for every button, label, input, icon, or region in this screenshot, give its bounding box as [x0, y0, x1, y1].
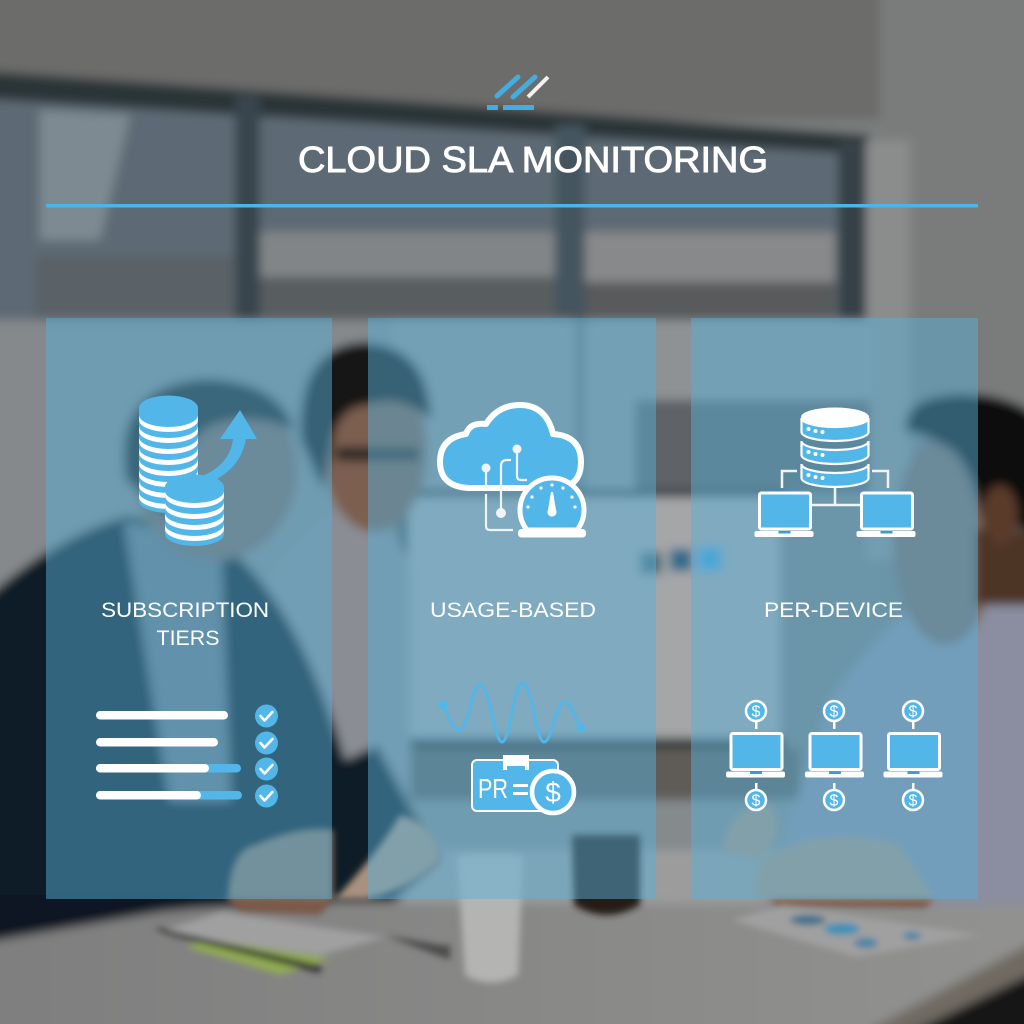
- table: [0, 902, 1024, 1024]
- icon: cloud with gauge: [440, 405, 586, 538]
- title: CLOUD SLA MONITORING: [298, 139, 768, 180]
- icon: feature list with checks: [96, 704, 278, 808]
- icon: price case with dollar: [472, 755, 574, 813]
- icon: price case with dollar: PR: [478, 773, 508, 804]
- left person: [0, 515, 440, 940]
- icon: coin stacks with rising arrow: [139, 396, 257, 546]
- label: per-device: PER-DEVICE: [764, 599, 903, 622]
- panel: subscription tiers: [46, 318, 332, 899]
- panel: usage-based: [368, 318, 656, 899]
- label: subscription tiers: TIERS: [156, 627, 220, 650]
- icon: database with two laptops: [754, 408, 916, 537]
- label: usage-based: USAGE-BASED: [430, 599, 596, 622]
- icon: per-device laptops with dollar coins: [726, 701, 942, 810]
- icon: price case with dollar: $: [545, 777, 561, 808]
- title rule: [46, 204, 978, 208]
- right person: [760, 570, 1024, 910]
- middle person: [255, 510, 410, 800]
- panel: per-device: [691, 318, 978, 899]
- icon: usage wave: [438, 683, 586, 742]
- hands and table objects: [154, 805, 980, 982]
- label: subscription tiers: SUBSCRIPTION: [101, 599, 269, 622]
- logo mark: [487, 77, 548, 110]
